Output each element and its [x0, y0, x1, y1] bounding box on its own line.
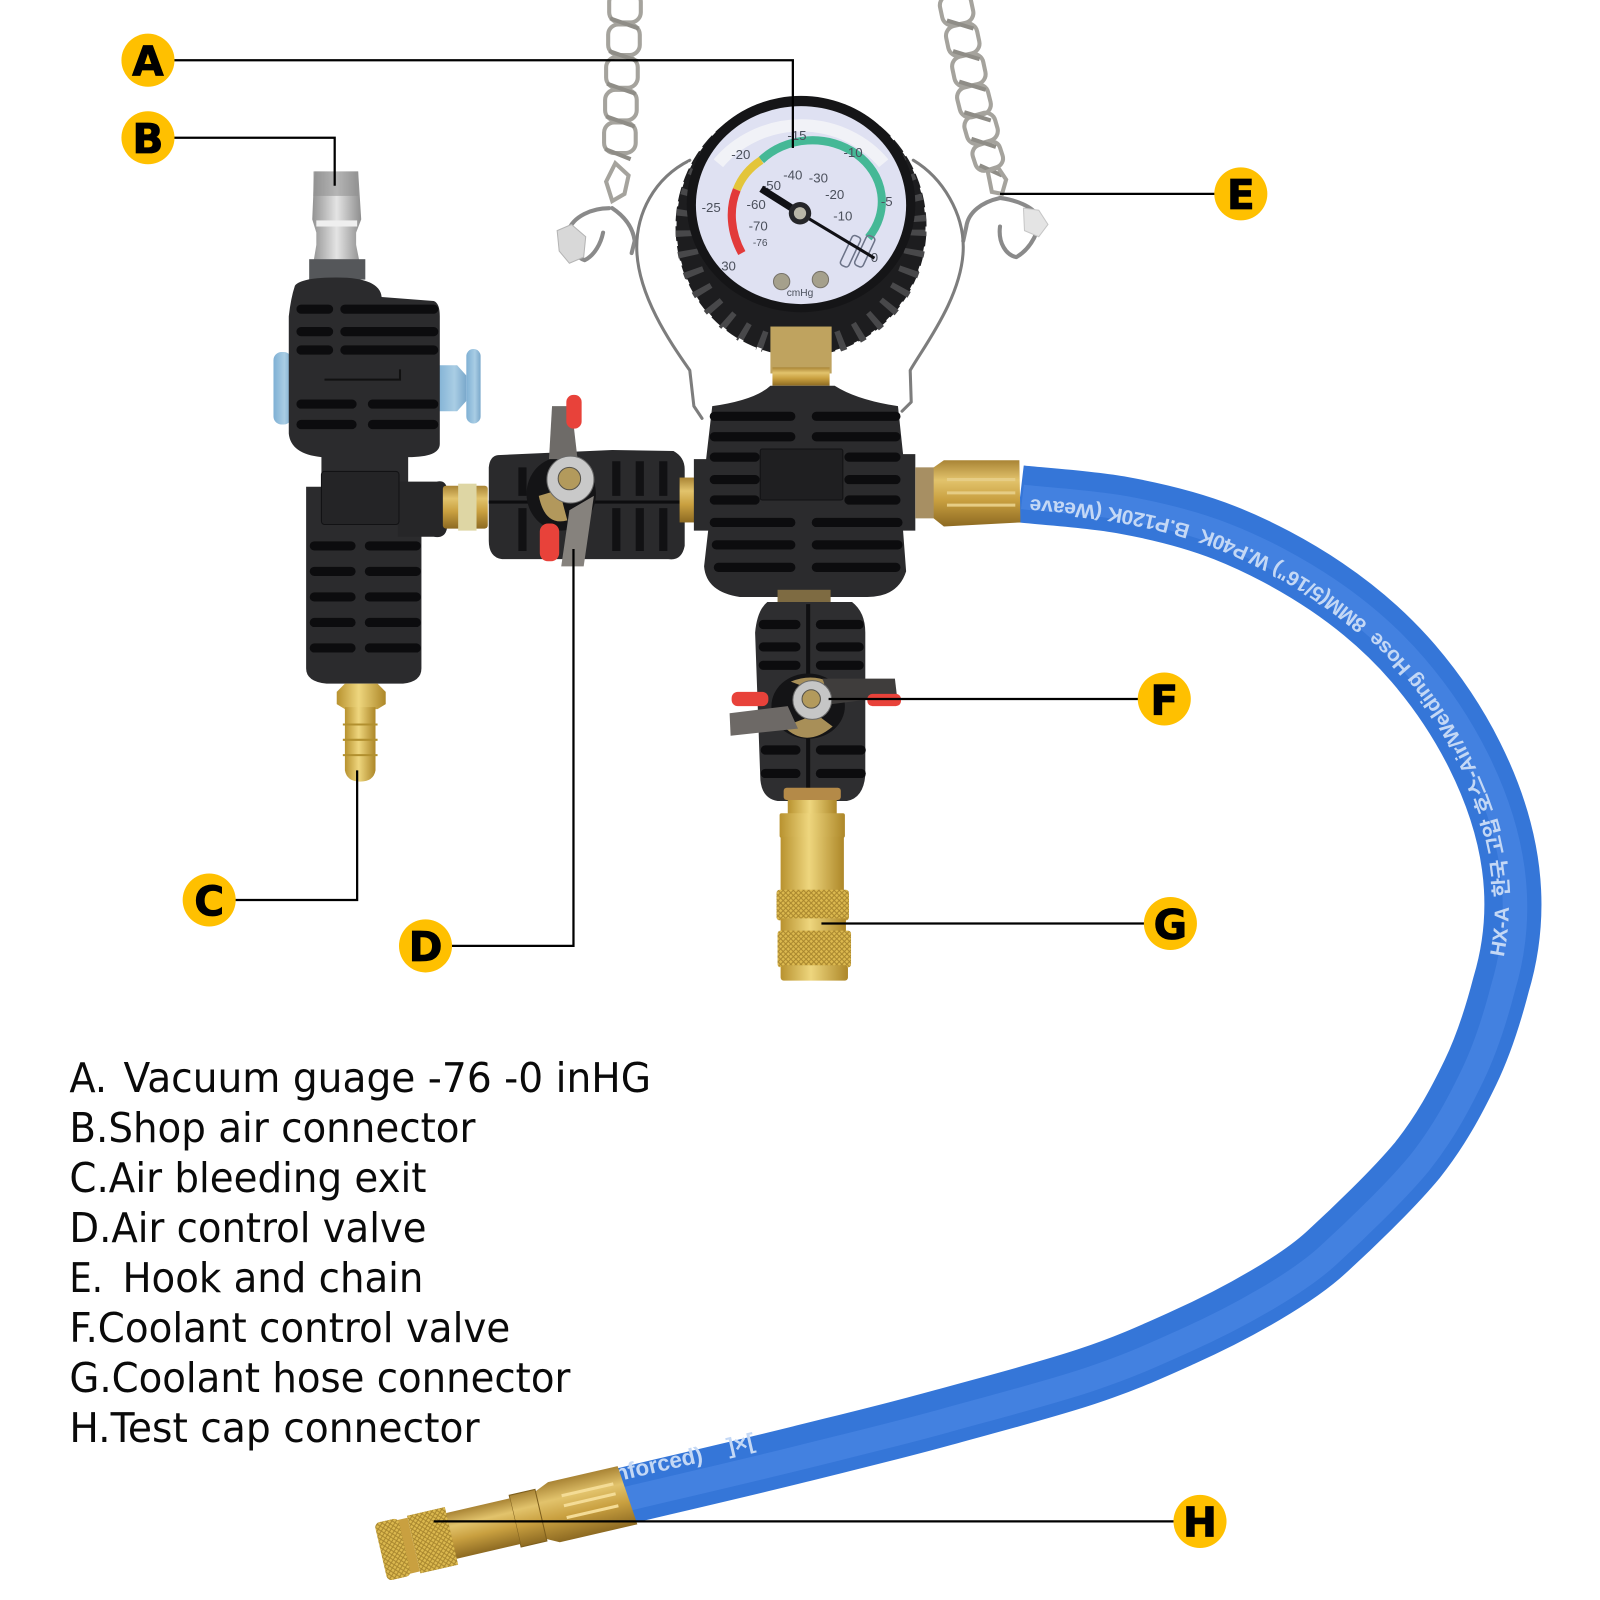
- left chain: [604, 0, 641, 201]
- leader lines: [151, 60, 1241, 1521]
- badge C: C: [194, 877, 224, 925]
- badge C: [183, 873, 236, 927]
- legend text block: [69, 1054, 651, 1452]
- legend text block: B.Shop air connector: [69, 1104, 476, 1152]
- left hook cap: [557, 224, 586, 263]
- blue release buttons: [273, 349, 481, 424]
- gauge scale numbers: cmHg: [787, 288, 814, 299]
- lower air block: [306, 487, 421, 684]
- vacuum gauge: [674, 96, 928, 357]
- blue air hose: ]×[: [724, 1428, 758, 1459]
- hose coupler H: [374, 1465, 637, 1582]
- shop air connector B: [309, 171, 365, 280]
- legend text block: C.Air bleeding exit: [69, 1154, 427, 1202]
- square boss: [321, 471, 399, 524]
- chains and hooks: [557, 0, 1048, 263]
- gauge scale numbers: 30: [721, 258, 736, 273]
- wire handle: [637, 160, 963, 418]
- legend text block: H.Test cap connector: [69, 1404, 480, 1452]
- air control valve D: [489, 395, 685, 566]
- gauge scale numbers: -40: [783, 168, 802, 183]
- left hook: [568, 208, 609, 260]
- badge B: [121, 111, 174, 164]
- gauge scale numbers: -15: [787, 128, 807, 143]
- valve opening and ball: [527, 457, 596, 531]
- gauge scale numbers: -25: [702, 200, 721, 215]
- side port: [398, 481, 447, 537]
- valve nut: [547, 456, 594, 503]
- valve opening and ball: [771, 673, 845, 739]
- air unit body: [289, 278, 447, 684]
- legend text block: G.Coolant hose connector: [69, 1354, 571, 1402]
- coolant hose connector G: [777, 788, 851, 981]
- badge G: G: [1154, 901, 1187, 949]
- legend text block: Vacuum guage -76 -0 inHG: [123, 1054, 651, 1102]
- levers: [730, 706, 798, 736]
- legend text block: E.: [69, 1254, 103, 1302]
- legend text block: A.: [69, 1054, 107, 1102]
- badge E: [1214, 167, 1267, 220]
- gauge scale numbers: -70: [749, 219, 768, 234]
- right hook: [1000, 198, 1039, 257]
- badge F: F: [1150, 676, 1178, 724]
- red caps: [540, 395, 582, 561]
- gauge scale numbers: -5: [881, 194, 893, 209]
- valve nut: [793, 681, 832, 719]
- badge G: [1144, 897, 1197, 950]
- legend text block: Hook and chain: [122, 1254, 423, 1302]
- badge A: [121, 34, 174, 87]
- right hook cap: [1023, 208, 1048, 237]
- top brass ferrule and hex: [915, 460, 1020, 527]
- badge H: [1173, 1495, 1227, 1548]
- coolant control valve F: [730, 602, 901, 801]
- gauge scale numbers: [702, 128, 893, 299]
- gauge scale numbers: -60: [747, 197, 766, 212]
- red caps: [732, 692, 901, 706]
- right chain: [938, 0, 1006, 194]
- gauge scale numbers: -76: [753, 238, 768, 249]
- gauge scale numbers: -50: [762, 178, 781, 193]
- badge F: [1138, 672, 1191, 726]
- gauge scale numbers: 0: [871, 250, 878, 265]
- manifold label plate: [760, 449, 843, 500]
- gauge scale numbers: -10: [833, 208, 852, 223]
- badge D: [399, 919, 452, 972]
- gauge colour arcs: [732, 140, 882, 253]
- gauge needle: [761, 189, 874, 258]
- badge B: B: [132, 115, 164, 163]
- gauge screws: [773, 271, 829, 290]
- badge E: E: [1227, 171, 1255, 219]
- gauge scale numbers: -20: [825, 187, 844, 202]
- badge H: H: [1183, 1499, 1217, 1547]
- lower lever: [561, 496, 594, 566]
- legend text block: F.Coolant control valve: [69, 1304, 510, 1352]
- brass spacer: [680, 478, 695, 522]
- brass nut between air unit and valve: [443, 484, 488, 531]
- legend text block: D.Air control valve: [69, 1204, 427, 1252]
- badge A: A: [132, 38, 164, 86]
- gauge scale numbers: -20: [731, 147, 750, 162]
- top lever: [549, 406, 578, 459]
- blue air hose: [612, 466, 1542, 1520]
- gauge scale numbers: -10: [843, 145, 863, 160]
- blue air hose: HX-A 한국 고압 호스-Air/Welding Hose 8MM(5/16") W.P40K B.P120K (Weave: [1030, 499, 1510, 956]
- blue air hose: nforced): [612, 1442, 705, 1487]
- air bleeding exit C: [337, 684, 386, 782]
- gauge scale numbers: -30: [809, 171, 828, 186]
- main manifold body: [694, 386, 915, 597]
- badge D: D: [409, 923, 442, 971]
- green tolerance slots: [839, 234, 876, 268]
- brass collar: [778, 590, 831, 602]
- gauge brass stem: [770, 327, 832, 386]
